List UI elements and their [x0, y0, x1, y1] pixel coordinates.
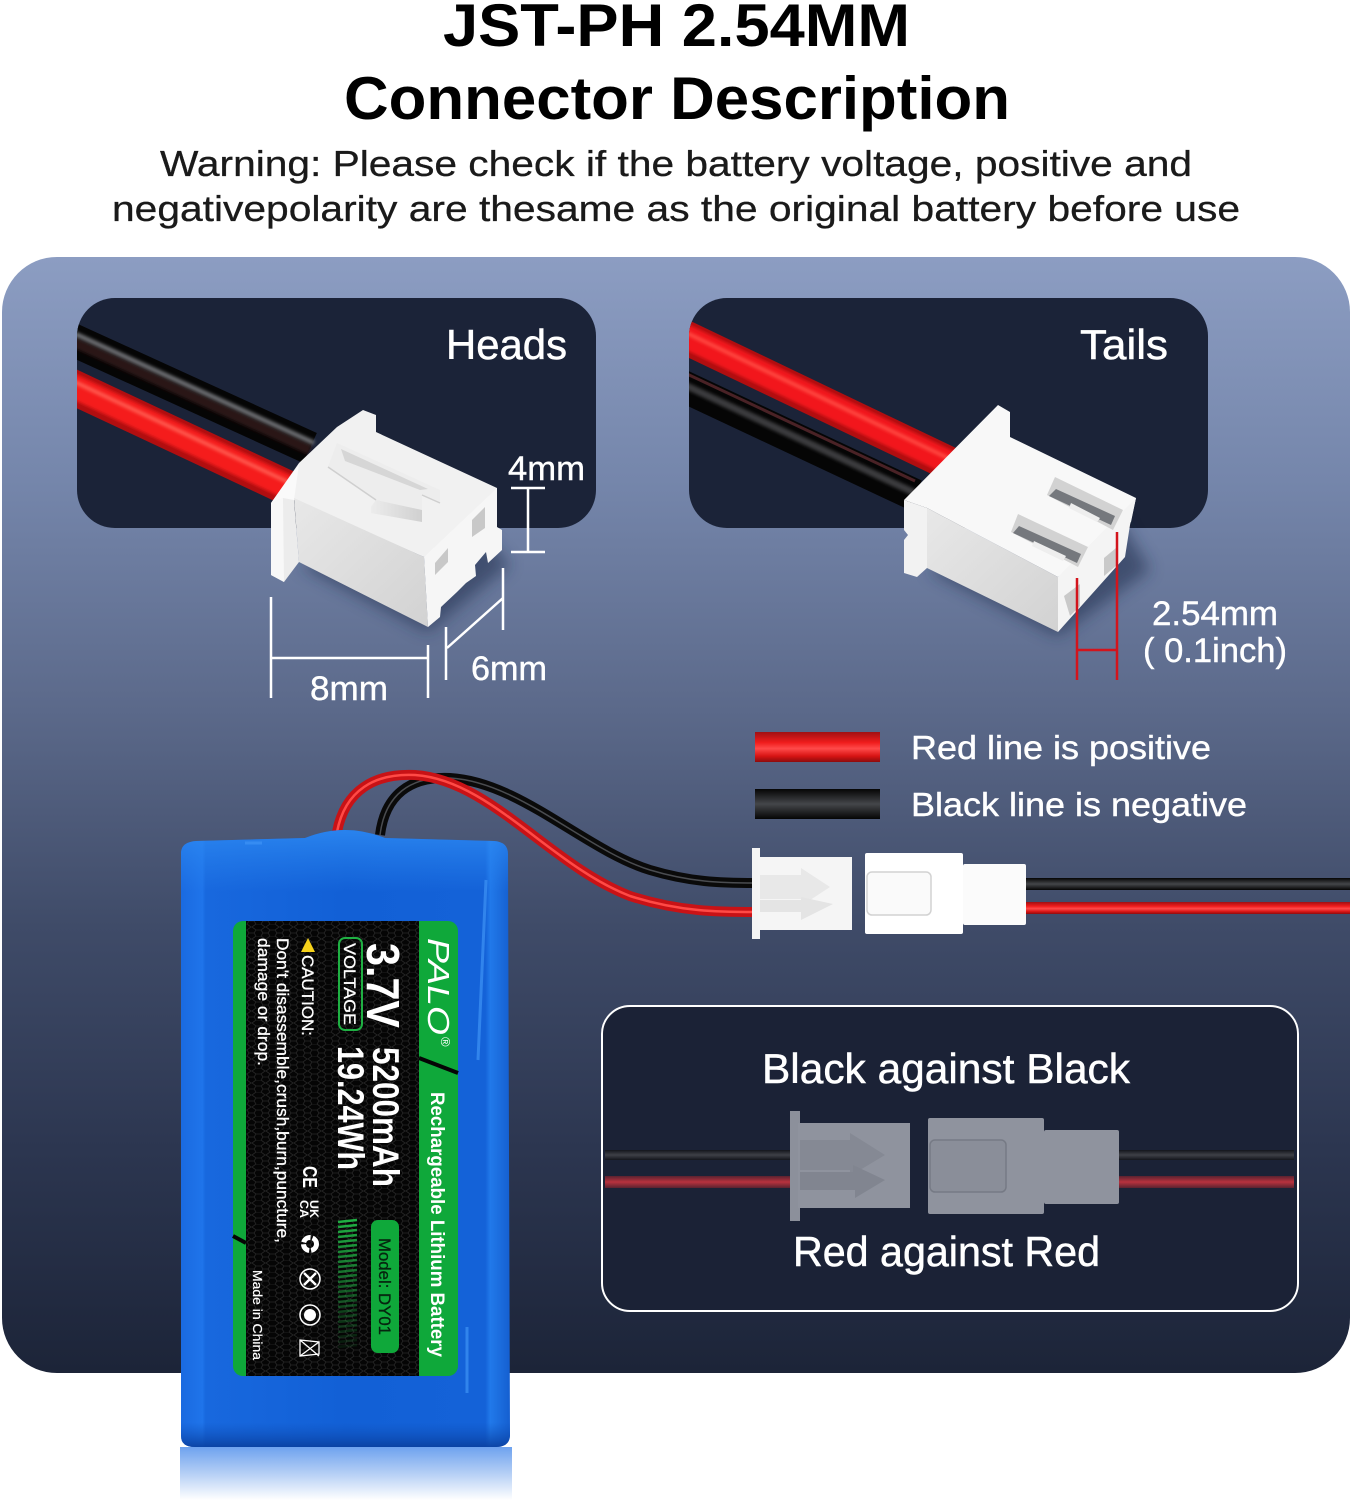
- certification marks: CE: [298, 1166, 320, 1188]
- model tag: [371, 1220, 399, 1353]
- model tag: Model: DY01: [375, 1238, 394, 1335]
- connector: female white: [865, 853, 1026, 934]
- legend red line: [755, 732, 880, 762]
- title: [344, 0, 1010, 132]
- battery body: [181, 830, 510, 1447]
- pin slots: [1047, 477, 1123, 530]
- energy: 19.24Wh: [330, 1046, 371, 1170]
- legend red text: Red line is positive: [911, 729, 1211, 766]
- dimensions: heads: [271, 488, 545, 698]
- label dividers: [233, 1058, 458, 1243]
- battery: [181, 830, 510, 1447]
- main gradient panel: [2, 257, 1350, 1373]
- guide text: red: Red against Red: [793, 1228, 1100, 1275]
- caution text: Don't disassemble,crush,burn,puncture,: [273, 938, 292, 1243]
- arrow mark: [328, 443, 440, 522]
- label green base: [233, 921, 458, 1376]
- charge bars: [338, 1220, 357, 1347]
- title: Connector Description: [344, 65, 1010, 132]
- tails connector: [904, 405, 1150, 636]
- battery label: [233, 921, 458, 1376]
- dimension labels: heads: 6mm: [471, 650, 547, 688]
- voltage: 3.7V: [357, 943, 409, 1028]
- connector: male white: [752, 848, 852, 939]
- heads connector: [271, 410, 510, 632]
- product name: Rechargeable Lithium Battery: [426, 1092, 447, 1357]
- guide male connector: [790, 1111, 910, 1221]
- voltage tag: VOLTAGE: [340, 943, 359, 1025]
- voltage tag: [339, 938, 362, 1030]
- guide female connector: [928, 1118, 1119, 1214]
- label black area with hex pattern: [246, 921, 419, 1376]
- caution text: damage or drop.: [254, 938, 273, 1066]
- panel: tails: [670, 298, 1208, 528]
- brand PALO: ®: [438, 1037, 453, 1047]
- legend black text: Black line is negative: [911, 786, 1247, 823]
- dimension label: 2.54mm: 2.54mm: [1152, 595, 1278, 633]
- legend black line: [755, 789, 880, 819]
- certification marks: CA: [297, 1200, 311, 1218]
- dimension label: 2.54mm: ( 0.1inch): [1143, 632, 1287, 670]
- dimension label: 2.54mm: [1143, 595, 1287, 670]
- tails wires: [670, 325, 950, 495]
- certification marks: [297, 1166, 321, 1356]
- right wires: [1026, 878, 1350, 914]
- dimension: 2.54mm pitch: [1077, 532, 1117, 680]
- battery wires: [337, 775, 755, 912]
- guide text: black: Black against Black: [762, 1045, 1131, 1092]
- capacity: 5200mAh: [365, 1047, 406, 1187]
- guide wires: [605, 1150, 1294, 1188]
- brand PALO: PALO: [421, 938, 456, 1035]
- dimension labels: heads: [310, 450, 585, 708]
- tails label: Tails: [1080, 321, 1168, 368]
- certification marks: UK: [307, 1200, 321, 1218]
- warning text: Warning: Please check if the battery voltage, positive and: [160, 143, 1192, 184]
- panel: heads: [60, 298, 596, 528]
- dimension labels: heads: 4mm: [508, 450, 585, 488]
- warning text: [112, 143, 1240, 229]
- battery reflection: [180, 1447, 512, 1500]
- caution text: [254, 938, 292, 1243]
- origin: Made in China: [250, 1270, 265, 1361]
- legend: [755, 729, 1247, 823]
- heads wires: [60, 327, 314, 489]
- caution: CAUTION:: [298, 955, 317, 1036]
- warning text: negativepolarity are thesame as the original battery before use: [112, 188, 1240, 229]
- heads label: Heads: [446, 321, 567, 368]
- panel: mating guide: [602, 1006, 1298, 1311]
- dimension labels: heads: 8mm: [310, 670, 388, 708]
